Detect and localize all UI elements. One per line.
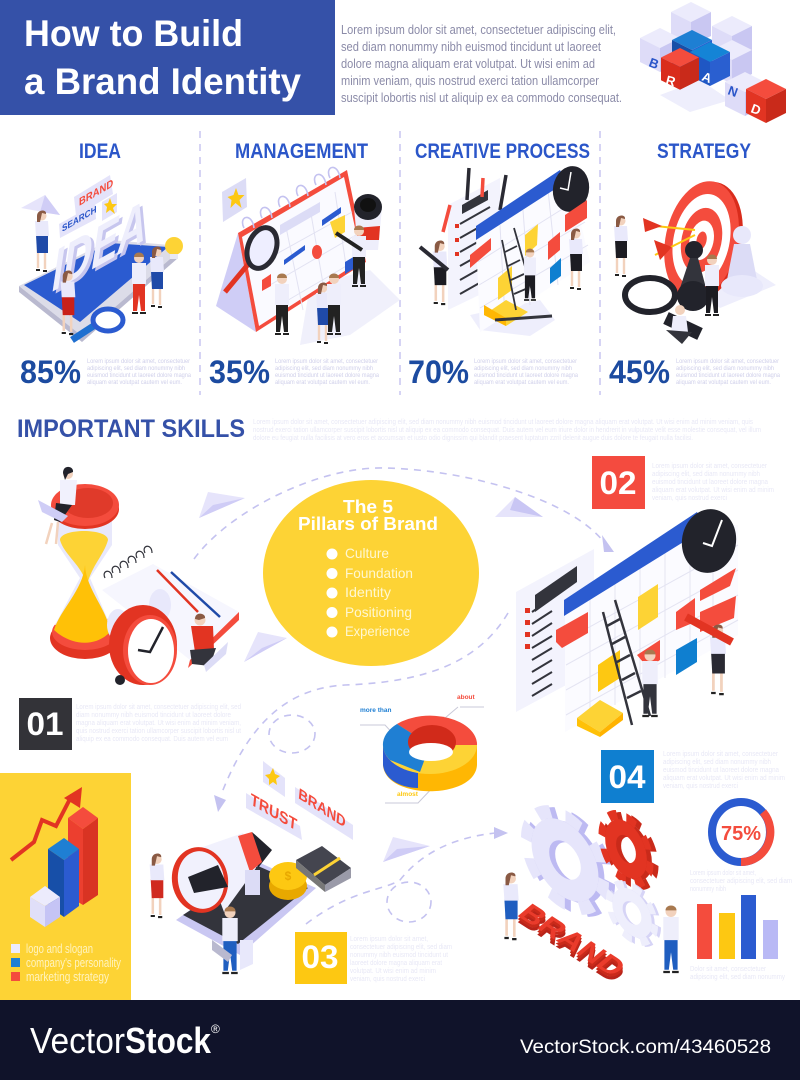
megaphone xyxy=(167,832,272,917)
person: man red pants xyxy=(132,252,146,314)
step 02: euismod tincidunt ut laoreet dolore magna xyxy=(652,479,768,486)
checklist lines xyxy=(460,207,490,294)
chart: 75 percent ring xyxy=(712,802,770,862)
illustration: gears and brand word xyxy=(503,796,679,988)
checklist lines xyxy=(532,601,552,696)
sign: brand: BRAND xyxy=(298,785,346,832)
title: a Brand Identity xyxy=(24,61,301,102)
notebook xyxy=(102,546,239,668)
sign: star xyxy=(263,761,285,797)
coins xyxy=(269,862,307,900)
legend: company's personality xyxy=(11,955,121,970)
illustration: creative process xyxy=(420,163,593,336)
stat: 45 percent: 45% xyxy=(609,354,670,390)
calendar xyxy=(238,170,366,332)
chart: bars xyxy=(697,895,778,959)
illustration: idea xyxy=(19,175,183,342)
bars caption: Dolor sit amet, consectetuer xyxy=(690,966,767,973)
red gear xyxy=(602,804,655,896)
person: man on ladder xyxy=(524,249,536,301)
stat: 70 percent: euismod tincidunt ut laoreet dolore magna xyxy=(474,372,578,379)
person: woman with tablet xyxy=(614,215,628,277)
intro paragraph: minim veniam, quis nostrud exerci tation ullamcorper xyxy=(341,73,600,88)
dashed arrow: 01 to 02 xyxy=(194,468,614,559)
pillar: positioning: Positioning xyxy=(345,604,412,620)
person: seated woman xyxy=(190,614,228,672)
marker xyxy=(336,233,362,250)
board blue bar xyxy=(476,170,566,240)
yellow block xyxy=(577,700,623,737)
sign: search: SEARCH xyxy=(62,204,97,235)
3D word idea: IDEA xyxy=(51,187,155,309)
donut callouts: almost xyxy=(397,791,419,798)
board grid xyxy=(566,520,738,718)
paper shadow xyxy=(470,300,555,336)
step 03: volutpat. Ut wisi enim ad minim xyxy=(350,968,436,975)
big gear xyxy=(526,796,610,926)
intro paragraph: Lorem ipsum dolor sit amet, consectetuer adipiscing elit, xyxy=(341,22,616,37)
heading: management: MANAGEMENT xyxy=(235,140,368,163)
ladder xyxy=(502,228,534,310)
paper shadow xyxy=(300,270,400,345)
intro paragraph: sed diam nonummy nibh euismod tincidunt ut laoreet xyxy=(341,39,601,54)
step 03: Lorem ipsum dolor sit amet, xyxy=(350,936,428,943)
stat: 85 percent: 85% xyxy=(20,354,81,390)
panel: yellow legend xyxy=(0,773,131,1000)
hourglass top disc xyxy=(51,484,119,529)
blue note xyxy=(676,638,697,675)
lying pencil xyxy=(495,316,552,320)
step 03: nonummy nibh euismod tincidunt ut xyxy=(350,952,448,959)
dashed arrow: 03 to 04 xyxy=(306,827,508,924)
paper plane xyxy=(383,837,430,862)
icon: coffee cup xyxy=(354,194,382,250)
blue bar xyxy=(564,512,706,616)
stat: 35 percent xyxy=(209,354,379,390)
stat: 70 percent: Lorem ipsum dolor sit amet, consectetuer xyxy=(474,358,578,365)
coins: $ xyxy=(285,869,292,883)
calendar marks xyxy=(262,202,355,291)
donut callouts: about xyxy=(457,694,476,701)
icon: brand letter cubes: R xyxy=(664,72,678,89)
stat: 35 percent: 35% xyxy=(209,354,270,390)
cash stacks xyxy=(296,846,351,892)
pillar: experience: Experience xyxy=(345,623,410,639)
step 02: 02 xyxy=(600,465,636,501)
sand top xyxy=(60,531,108,585)
stat: 85 percent: euismod tincidunt ut laoreet dolore magna xyxy=(87,372,191,379)
step 01: Lorem ipsum dolor sit amet, consectetuer adipiscing elit, sed xyxy=(76,704,241,711)
icon: star sign xyxy=(102,193,117,221)
sand bottom xyxy=(54,565,110,643)
checklist paper xyxy=(448,178,500,310)
stat: 70 percent: adipiscing elit, sed diam nonummy nibh xyxy=(474,365,572,372)
board grid xyxy=(478,190,588,318)
legend: marketing strategy xyxy=(11,969,109,984)
3D word brand: BRAND xyxy=(511,905,632,988)
circle title: Pillars of Brand xyxy=(298,514,438,534)
stat: 35 percent: euismod tincidunt ut laoreet dolore magna xyxy=(275,372,379,379)
icon: magnifier xyxy=(225,223,282,292)
sign: brand xyxy=(74,175,113,216)
checkboxes xyxy=(525,608,530,649)
legend: marketing strategy: marketing strategy xyxy=(26,969,109,984)
small gear xyxy=(609,875,658,952)
person: seated man with laptop xyxy=(666,305,692,344)
skills description: dolore eu feugiat nulla facilisis at vero eros et accumsan et iusto odio dignissim qui blandit praesent luptatum zzril delenit augue duis dolore te feugait nulla facilisi. xyxy=(253,435,693,442)
person: woman with laptop xyxy=(38,467,77,544)
heading: strategy: STRATEGY xyxy=(657,140,751,163)
stat: 70 percent: aliquam erat volutpat cautem vel eum. xyxy=(474,379,569,386)
black label xyxy=(535,566,577,612)
icon: brand letter cubes: A xyxy=(700,69,715,86)
step 02: veniam, quis nostrud exerci xyxy=(652,495,727,502)
stat: 70 percent xyxy=(408,354,578,390)
red flags xyxy=(556,568,736,648)
black cylinder xyxy=(666,318,700,334)
stat: 35 percent: Lorem ipsum dolor sit amet, consectetuer xyxy=(275,358,379,365)
board xyxy=(565,525,738,732)
person: woman with plane xyxy=(35,210,49,272)
intro paragraph: dolore magna aliquam erat volutpat. Ut wisi enim ad xyxy=(341,56,595,71)
paper plane xyxy=(199,492,245,518)
step 04: Lorem ipsum dolor sit amet, consectetuer xyxy=(663,751,779,758)
step 04: 04 xyxy=(608,759,646,795)
3D word idea xyxy=(48,185,155,309)
legend: logo and slogan: logo and slogan xyxy=(26,941,93,956)
illustration: strategy xyxy=(614,174,776,344)
step 01: diam nonummy nibh euismod tincidunt ut laoreet dolore xyxy=(76,712,231,719)
phone xyxy=(176,862,316,955)
stat: 35 percent: adipiscing elit, sed diam nonummy nibh xyxy=(275,365,373,372)
checkboxes xyxy=(455,224,459,256)
3D word brand: BRAND xyxy=(511,902,632,985)
person: man xyxy=(327,274,341,335)
dashed arrow: 02 to 03 xyxy=(214,613,508,812)
intro paragraph: suscipit lobortis nisl ut aliquip ex ea commodo consequat. xyxy=(341,90,622,105)
legend: company's personality: company's personality xyxy=(26,955,121,970)
paper plane xyxy=(244,632,287,662)
donut callouts xyxy=(360,694,484,803)
ring caption: Lorem ipsum dolor sit amet, xyxy=(690,870,756,877)
step 03: veniam, quis nostrud exerci xyxy=(350,976,425,983)
title: How to Build xyxy=(24,13,243,54)
step 03 xyxy=(295,932,452,984)
pencil blue xyxy=(171,572,220,617)
board xyxy=(476,170,590,332)
person: seated man xyxy=(212,906,253,974)
chart: donut xyxy=(360,694,484,803)
step 01 xyxy=(19,698,241,750)
step 02: aliquam erat volutpat. Ut wisi enim ad minim xyxy=(652,487,774,494)
stat: 35 percent: aliquam erat volutpat cautem vel eum. xyxy=(275,379,370,386)
black magnifier xyxy=(625,278,675,312)
white pawn xyxy=(721,226,763,297)
pillar: foundation: Foundation xyxy=(345,565,413,581)
icon: brand letter cubes: D xyxy=(749,101,763,118)
step 02: adipiscing elit, sed diam nonummy nibh xyxy=(652,471,760,478)
hourglass glass xyxy=(55,520,112,625)
pillar: culture: Culture xyxy=(345,545,389,561)
floor xyxy=(675,255,776,308)
footer logo: ® xyxy=(211,1022,220,1036)
calendar grid xyxy=(262,192,360,310)
sign: trust: TRUST xyxy=(250,790,298,835)
black king xyxy=(677,241,709,311)
heading: idea: IDEA xyxy=(79,140,121,163)
step 04: adipiscing elit, sed diam nonummy nibh xyxy=(663,759,771,766)
stat: 45 percent: adipiscing elit, sed diam nonummy nibh xyxy=(676,365,774,372)
checklist paper xyxy=(516,549,594,712)
stat: 85 percent: Lorem ipsum dolor sit amet, consectetuer xyxy=(87,358,191,365)
header banner xyxy=(0,0,335,115)
trend arrow xyxy=(11,787,82,860)
icon: brand letter cubes xyxy=(640,2,786,123)
calendar stand xyxy=(216,233,256,332)
stat: 85 percent: aliquam erat volutpat cautem vel eum. xyxy=(87,379,182,386)
heading: creative process: CREATIVE PROCESS xyxy=(415,140,590,163)
hourglass base xyxy=(50,614,120,659)
step 03: 03 xyxy=(302,939,338,975)
3D word idea: IDEA xyxy=(48,185,152,307)
illustration: management xyxy=(216,167,400,345)
step 04: veniam, quis nostrud exerci xyxy=(663,783,738,790)
person: woman with folder xyxy=(503,873,519,940)
step 01: aliquip ex ea commodo consequat. Duis autem vel eum xyxy=(76,736,228,743)
pillar: culture xyxy=(326,545,389,561)
chart: 75 percent ring: 75% xyxy=(721,823,761,845)
stat: 45 percent: Lorem ipsum dolor sit amet, consectetuer xyxy=(676,358,780,365)
person: woman at board xyxy=(569,228,583,290)
person: man with tie xyxy=(275,274,289,335)
calendar rings xyxy=(243,167,340,228)
stat: 45 percent xyxy=(609,354,780,390)
illustration: hourglass and clock xyxy=(38,467,239,685)
icon: magnifier xyxy=(72,309,123,340)
person: woman with pencil xyxy=(710,625,726,695)
legend: logo and slogan xyxy=(11,941,93,956)
stat: 45 percent: aliquam erat volutpat cautem vel eum. xyxy=(676,379,771,386)
darts xyxy=(643,218,695,260)
step 02: Lorem ipsum dolor sit amet, consectetuer xyxy=(652,463,768,470)
circle title: The 5 xyxy=(343,497,393,517)
footer logo: VectorStock xyxy=(30,1020,223,1061)
illustration: megaphone on phone xyxy=(150,761,353,974)
person: woman with tablet xyxy=(150,853,164,918)
big pencil xyxy=(420,247,448,270)
stat: 85 percent xyxy=(20,354,191,390)
person: woman blue skirt xyxy=(316,282,330,344)
icon: light bulb xyxy=(165,237,183,259)
intro paragraph xyxy=(341,22,622,105)
pillar: identity xyxy=(326,584,391,600)
ring caption: nonummy nibh xyxy=(690,886,726,893)
icon: star sign xyxy=(222,178,247,222)
person: man xyxy=(663,905,679,973)
3D bars xyxy=(30,807,98,927)
footer url: VectorStock.com/43460528 xyxy=(520,1037,771,1058)
phone xyxy=(19,240,178,336)
stat: 85 percent: adipiscing elit, sed diam nonummy nibh xyxy=(87,365,185,372)
person: man with marker xyxy=(352,226,366,287)
icon: brand letter cubes: B xyxy=(647,55,661,72)
heading: important skills: IMPORTANT SKILLS xyxy=(17,415,245,443)
step 03: consectetuer adipiscing elit, sed diam xyxy=(350,944,452,951)
step 04 xyxy=(601,750,785,803)
pencils xyxy=(443,168,506,232)
icon: brand letter cubes: N xyxy=(726,83,740,100)
step 04: aliquam erat volutpat. Ut wisi enim ad minim xyxy=(663,775,785,782)
ladder xyxy=(603,600,650,725)
column dividers xyxy=(200,131,600,395)
black label xyxy=(462,190,488,214)
person: woman with pencil xyxy=(433,240,447,305)
paper plane xyxy=(495,497,543,517)
sign: brand: BRAND xyxy=(79,177,113,209)
illustration: schedule board xyxy=(516,505,741,737)
flags and stickies xyxy=(470,200,587,326)
person: woman blue skirt xyxy=(150,246,164,308)
target xyxy=(654,174,753,307)
stat: 70 percent: 70% xyxy=(408,354,469,390)
big pencil xyxy=(686,617,732,642)
pillar: identity: Identity xyxy=(345,584,391,600)
step 01: 01 xyxy=(26,706,64,742)
yellow notes xyxy=(598,584,660,692)
stat: 45 percent: euismod tincidunt ut laoreet dolore magna xyxy=(676,372,780,379)
pencil red xyxy=(157,570,198,612)
person: man behind king xyxy=(705,254,719,316)
person: woman red skirt xyxy=(61,270,75,335)
step 02 xyxy=(592,456,774,509)
donut callouts: more than xyxy=(360,707,391,714)
paper plane xyxy=(21,195,60,215)
step 03: laoreet dolore magna aliquam erat xyxy=(350,960,442,967)
person: man on ladder xyxy=(642,649,658,717)
clock xyxy=(549,163,593,215)
step 01: magna aliquam erat volutpat. Ut wisi enim ad minim veniam, xyxy=(76,720,241,727)
central circle: the 5 pillars of brand xyxy=(263,480,479,666)
3D word brand: BRAND xyxy=(511,899,632,982)
clock xyxy=(677,505,741,577)
bars caption: adipiscing elit, sed diam nonummy xyxy=(690,974,785,981)
alarm clock xyxy=(107,589,177,685)
step 04: euismod tincidunt ut laoreet dolore magna xyxy=(663,767,779,774)
step 01: quis nostrud exerci tation ullamcorper suscipit lobortis nisl ut xyxy=(76,728,241,735)
footer band xyxy=(0,1000,800,1080)
